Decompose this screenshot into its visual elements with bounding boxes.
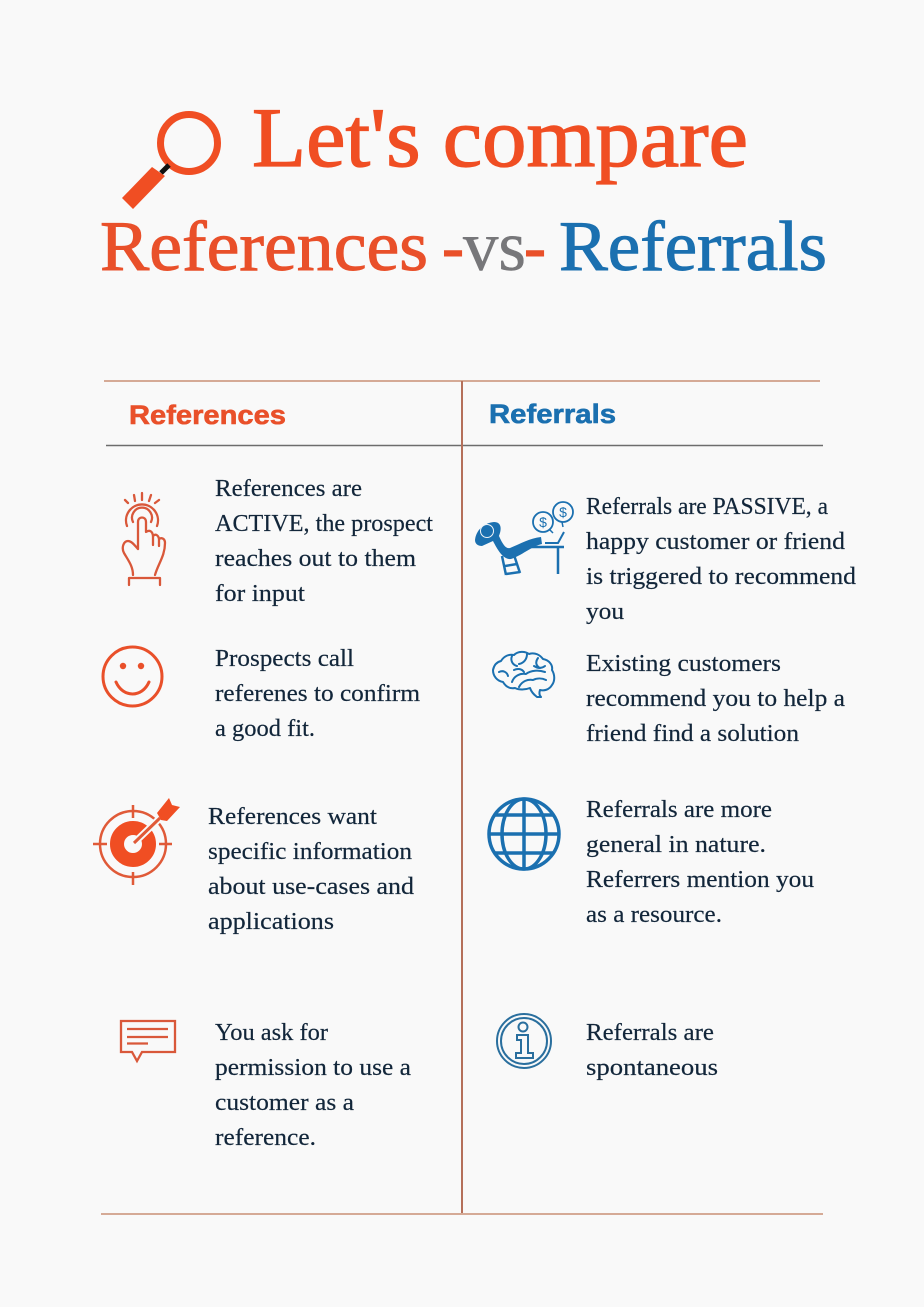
text: referrals are passive <box>586 493 856 625</box>
text: references are active: reaches out to them <box>215 545 416 572</box>
title: References vs Referrals <box>100 208 827 286</box>
icon: relaxed person at desk: $ <box>539 514 547 530</box>
text: existing customers: recommend you to help a <box>586 685 845 712</box>
text: referrals are passive: you <box>586 598 624 625</box>
icon: magnifying glass <box>122 114 218 209</box>
title: References vs Referrals: vs <box>463 208 526 286</box>
icon: smiley face <box>103 647 162 706</box>
icon: speech bubble <box>121 1021 175 1061</box>
text: more general <box>586 796 814 928</box>
text: more general: as a resource. <box>586 901 722 928</box>
text: references are active: References are <box>215 475 362 502</box>
text: referrals are passive: is triggered to recommend <box>586 563 856 590</box>
text: references are active: for input <box>215 580 305 607</box>
icon: information <box>497 1014 551 1068</box>
text: prospects call: Prospects call <box>215 645 354 672</box>
text: spontaneous: Referrals are <box>586 1019 714 1046</box>
text: prospects call: a good fit. <box>215 715 315 742</box>
text: permission: reference. <box>215 1124 316 1151</box>
text: references want: about use-cases and <box>208 873 414 900</box>
icon: brain <box>493 652 554 697</box>
text: references are active: ACTIVE, the prospect <box>215 510 433 537</box>
heading: Referrals: Referrals <box>489 399 616 429</box>
title: References vs Referrals: - <box>442 208 464 286</box>
text: permission: You ask for <box>215 1019 328 1046</box>
text: references want: applications <box>208 908 334 935</box>
icon: target with dart <box>93 798 180 885</box>
text: permission <box>215 1019 411 1151</box>
icon: globe <box>489 799 559 869</box>
panel: references column <box>93 475 433 1151</box>
text: references want: References want <box>208 803 377 830</box>
text: existing customers: friend find a solution <box>586 720 799 747</box>
text: references want: specific information <box>208 838 412 865</box>
text: spontaneous: spontaneous <box>586 1054 718 1081</box>
text: more general: general in nature. <box>586 831 766 858</box>
title: References vs Referrals: References <box>100 208 428 286</box>
title: References vs Referrals: - <box>524 208 546 286</box>
icon: relaxed person at desk: $ <box>559 504 567 520</box>
text: permission: customer as a <box>215 1089 354 1116</box>
text: references are active <box>215 475 433 607</box>
text: more general: Referrals are more <box>586 796 772 823</box>
panel: referrals column <box>475 493 856 1081</box>
title: References vs Referrals: Referrals <box>559 208 827 286</box>
comparison table rules <box>101 381 823 1214</box>
icon: relaxed person at desk <box>475 502 573 575</box>
text: existing customers <box>586 650 845 747</box>
text: prospects call: referenes to confirm <box>215 680 420 707</box>
title: Let's compare: Let's compare <box>252 91 748 185</box>
text: permission: permission to use a <box>215 1054 411 1081</box>
text: prospects call <box>215 645 420 742</box>
text: references want <box>208 803 414 935</box>
text: existing customers: Existing customers <box>586 650 781 677</box>
icon: tapping hand <box>123 493 165 585</box>
text: referrals are passive: happy customer or friend <box>586 528 845 555</box>
text: referrals are passive: Referrals are PASSIVE, a <box>586 493 828 520</box>
text: spontaneous <box>586 1019 718 1081</box>
text: more general: Referrers mention you <box>586 866 814 893</box>
heading: References: References <box>129 400 286 430</box>
